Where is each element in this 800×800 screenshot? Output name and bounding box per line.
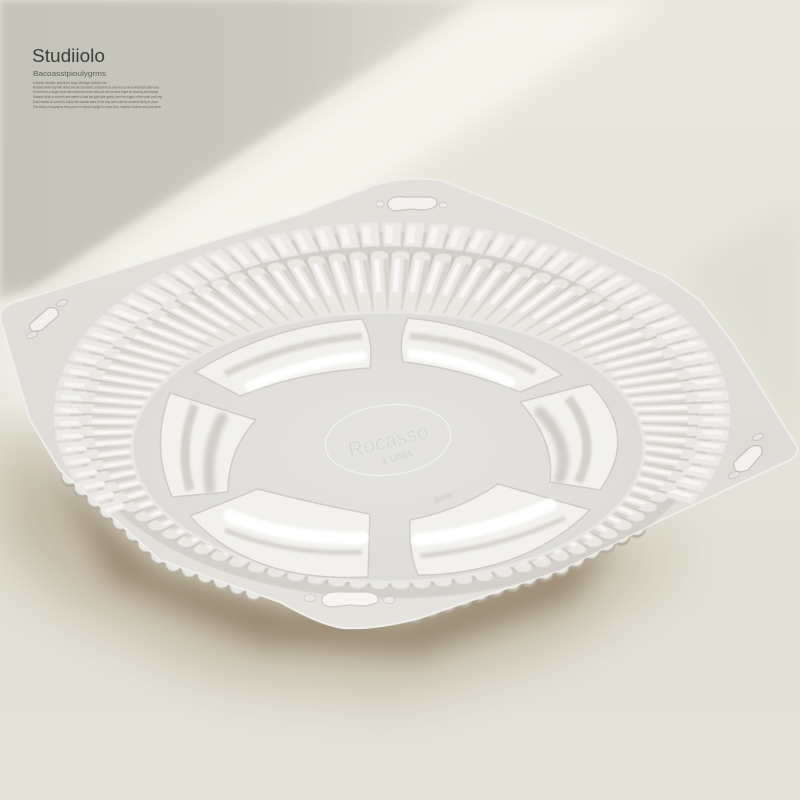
tray flange outline: [0, 179, 798, 628]
outer ribbed ring: [54, 222, 730, 598]
description text: Each section is curved to follow the circular base of the tray and holds its contents firmly in place: [33, 100, 158, 104]
corner tab: right: [727, 432, 765, 480]
embossed center label: [322, 399, 454, 481]
tray cast shadow: [0, 430, 690, 690]
compartment: top left: [195, 319, 371, 396]
inner ribbed ring: [78, 251, 703, 589]
compartment: right: [520, 384, 618, 490]
corner tab: bottom: [304, 592, 395, 607]
tray: [0, 176, 800, 633]
description text: Moulded white tray with ribbed rim and six raised compartments around a central embossed label area: [33, 86, 159, 90]
description text: Surface finish is smooth and matte so that the light falls gently over the ridges of the outer wall ring: [33, 95, 162, 99]
title block: [32, 45, 162, 109]
tray floor: [132, 312, 644, 582]
tray underside scallops: [70, 476, 650, 614]
description text: [33, 81, 162, 109]
description text: Lorem studio product tray design notes etc.: [33, 81, 108, 85]
compartment: bottom right: [410, 484, 590, 575]
description text: Formed from a single sheet with reinforced corner tabs and soft rounded edges for stacking and storage: [33, 90, 158, 94]
corner tab: left: [25, 298, 69, 340]
subtitle: Bacoasstpioulygrms: [33, 69, 106, 78]
embossed small mark: aiva: [433, 489, 454, 506]
title: Studiiolo: [32, 45, 105, 66]
compartment: top right: [401, 318, 562, 392]
compartment: left: [160, 393, 256, 497]
description text: The studio photographs every piece in natural daylight to show form, material, shadow and proportion: [33, 105, 161, 109]
embossed center label: Rocasso: [346, 420, 431, 462]
compartment: bottom left: [190, 489, 370, 578]
embossed center label: 1 UNIA: [380, 448, 415, 467]
corner tab: top: [376, 197, 447, 211]
